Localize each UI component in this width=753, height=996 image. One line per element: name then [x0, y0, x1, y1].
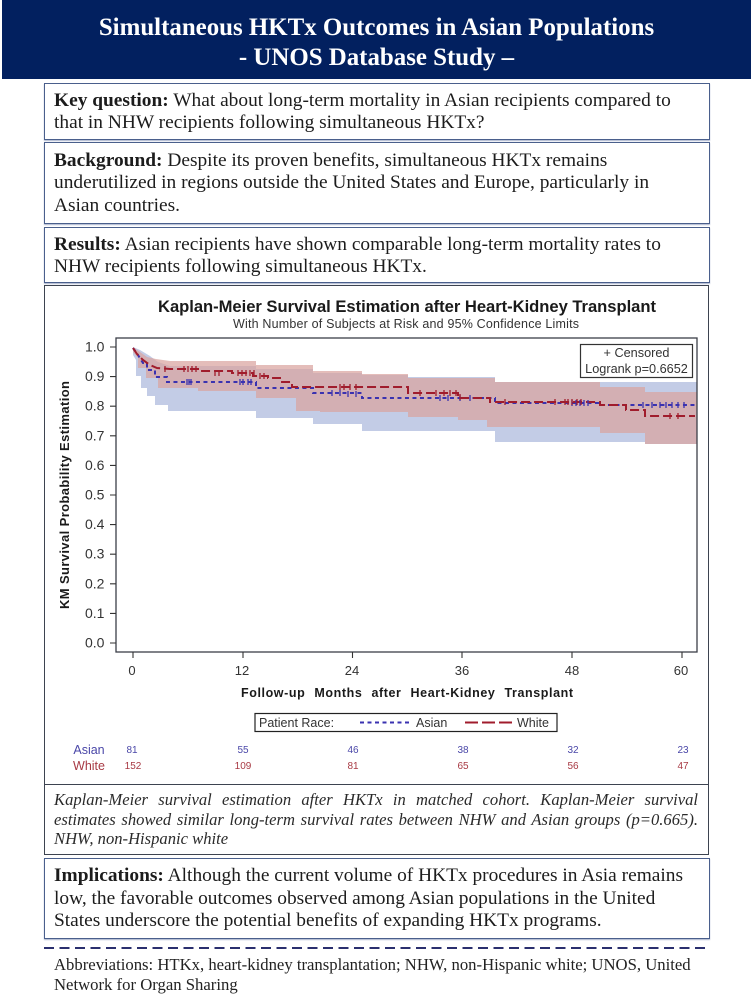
patient race legend: Patient Race: — [259, 716, 334, 730]
patient race legend: White — [517, 716, 549, 730]
x axis: 36 — [455, 663, 469, 678]
y axis: 0.1 — [85, 605, 105, 621]
at-risk table: Asian: 46 — [347, 745, 359, 756]
title banner: - UNOS Database Study – — [239, 44, 514, 71]
panel: background: Asian countries. — [54, 194, 180, 216]
caption text: estimates showed similar long-term survival rates between NHW and Asian groups (p=0.665). — [54, 810, 698, 828]
y axis: 0.4 — [85, 516, 105, 532]
title banner — [2, 0, 751, 79]
at-risk table: White: 109 — [235, 761, 252, 772]
x axis — [128, 652, 688, 678]
y axis title: KM Survival Probability Estimation — [57, 381, 72, 609]
panel: results: NHW recipients following simultaneous HKTx. — [54, 256, 427, 277]
title banner: Simultaneous HKTx Outcomes in Asian Populations — [99, 14, 654, 41]
x axis: 60 — [674, 663, 688, 678]
at-risk table: Asian: Asian — [73, 743, 105, 757]
panel: key question: Key question: What about long-term mortality in Asian recipients compared to — [54, 90, 671, 110]
patient race legend: Asian — [416, 716, 447, 730]
panel: key question: that in NHW recipients following simultaneous HKTx? — [54, 112, 484, 133]
y axis: 0.6 — [85, 457, 105, 473]
y axis: 0.7 — [85, 427, 105, 443]
confidence band: Asian — [133, 347, 697, 444]
panel: Kaplan-Meier chart — [44, 285, 709, 785]
abbreviations footnote: Network for Organ Sharing — [54, 975, 238, 994]
at-risk table: White — [73, 759, 689, 773]
White KM curve — [133, 348, 695, 416]
chart subtitle: With Number of Subjects at Risk and 95% Confidence Limits — [233, 317, 579, 331]
x axis: 24 — [345, 663, 359, 678]
abbreviations footnote: Abbreviations: HTKx, heart-kidney transplantation; NHW, non-Hispanic white; UNOS, United — [54, 954, 691, 974]
y axis: 0.0 — [85, 634, 105, 650]
at-risk table: Asian: 81 — [126, 745, 138, 756]
Asian KM curve — [133, 348, 695, 405]
censored / logrank legend: Logrank p=0.6652 — [585, 362, 688, 376]
panel: figure caption — [44, 784, 709, 855]
panel: background — [44, 142, 710, 224]
censored / logrank legend: + Censored — [604, 346, 669, 360]
panel: implications: States underscore the potential benefits of expanding HKTx programs. — [54, 910, 602, 931]
at-risk table: White: 152 — [125, 761, 142, 772]
y axis: 0.5 — [85, 486, 105, 502]
x axis: 48 — [565, 663, 579, 678]
at-risk table: White: White — [73, 759, 105, 773]
at-risk table: White: 47 — [677, 761, 689, 772]
panel: results: Results: Asian recipients have shown comparable long-term mortality rates to — [54, 234, 661, 254]
at-risk table: White: 81 — [347, 761, 359, 772]
panel: background: Background: Despite its proven benefits, simultaneous HKTx remains — [54, 150, 607, 170]
at-risk table: White: 56 — [567, 761, 579, 772]
abbreviations footnote — [54, 954, 691, 994]
plot frame — [116, 338, 697, 652]
censored marks: Asian — [187, 379, 684, 408]
caption text: Kaplan-Meier survival estimation after HKTx in matched cohort. Kaplan-Meier survival — [54, 790, 698, 808]
chart title: Kaplan-Meier Survival Estimation after Heart-Kidney Transplant — [158, 297, 656, 316]
y axis: 0.2 — [85, 575, 105, 591]
censored / logrank legend — [580, 344, 692, 378]
censored marks: White — [165, 366, 678, 419]
patient race legend — [255, 714, 557, 732]
y axis: 0.8 — [85, 398, 105, 414]
panel: implications: Implications: Although the current volume of HKTx procedures in Asia remains — [54, 865, 683, 886]
y axis — [85, 338, 116, 650]
y axis: 0.3 — [85, 546, 105, 562]
panel: key question — [44, 83, 710, 140]
at-risk table: White: 65 — [457, 761, 469, 772]
caption text: NHW, non-Hispanic white — [54, 828, 228, 848]
x axis title: Follow-up Months after Heart-Kidney Transplant — [241, 686, 574, 700]
x axis: 0 — [128, 663, 136, 678]
confidence band: White — [133, 347, 697, 444]
y axis: 1.0 — [85, 338, 105, 354]
panel: implications — [44, 858, 710, 939]
at-risk table: Asian: 55 — [237, 745, 249, 756]
at-risk table: Asian: 38 — [457, 745, 469, 756]
at-risk table: Asian: 32 — [567, 745, 579, 756]
at-risk table: Asian — [73, 743, 689, 757]
panel: results — [44, 227, 710, 283]
at-risk table: Asian: 23 — [677, 745, 689, 756]
panel: background: underutilized in regions outside the United States and Europe, particularly in — [54, 172, 649, 193]
y axis: 0.9 — [85, 368, 105, 384]
panel: implications: low, the favorable outcomes observed among Asian populations in the United — [54, 888, 655, 908]
dashed divider — [44, 947, 708, 949]
x axis: 12 — [235, 663, 249, 678]
